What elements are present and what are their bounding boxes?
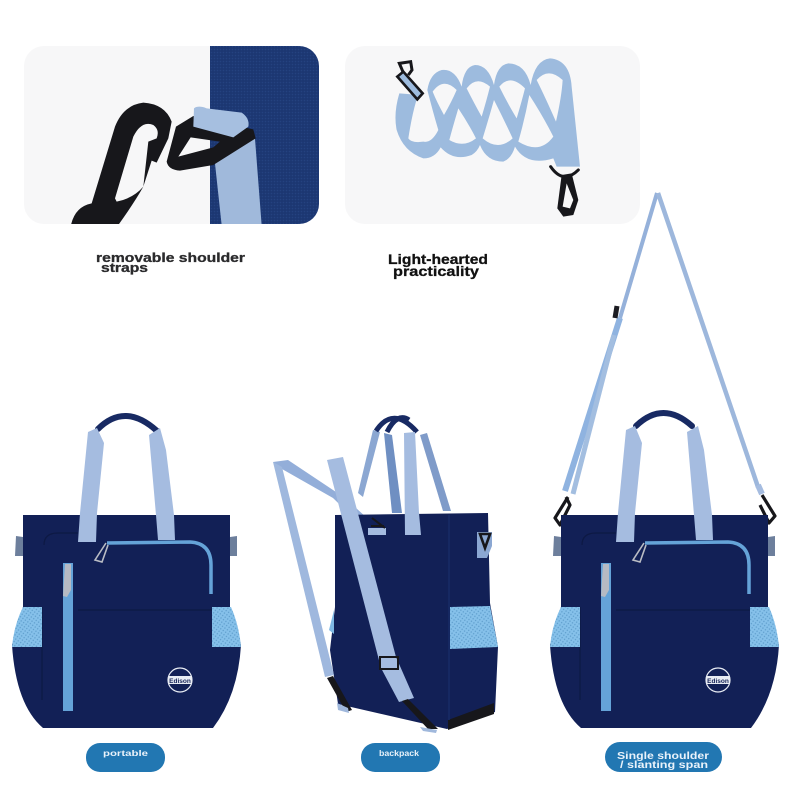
front handle strap	[404, 432, 421, 535]
bag: front view with shoulder strap	[550, 193, 779, 728]
mesh pocket	[450, 606, 498, 649]
right shoulder strap	[327, 457, 414, 702]
label pill: portable	[86, 743, 165, 772]
logo badge	[168, 668, 192, 692]
label pill: portable: portable	[103, 749, 149, 758]
small buckle	[397, 62, 423, 99]
panel: removable strap close-up	[71, 46, 319, 224]
long shoulder strap	[565, 193, 762, 494]
body	[550, 515, 779, 728]
mesh pockets	[550, 607, 580, 647]
label pill: backpack: backpack	[379, 749, 420, 758]
handle arcs	[376, 418, 417, 432]
logo badge: Edison	[169, 678, 191, 685]
folded light blue strap	[395, 58, 580, 167]
handle	[98, 416, 157, 431]
zipper pull	[601, 564, 609, 597]
small left mesh	[329, 610, 334, 634]
side loop with ring	[477, 532, 492, 558]
body	[12, 515, 241, 728]
triangular ring	[167, 116, 256, 171]
strap loop	[193, 107, 249, 137]
black snap hook	[71, 103, 172, 225]
black snap hooks	[555, 495, 775, 525]
caption: light-hearted practicality: practicality	[393, 263, 479, 279]
caption: removable shoulder straps	[96, 250, 245, 275]
body	[330, 513, 498, 729]
label pill: single shoulder: Single shoulder	[617, 751, 709, 762]
bag: front view, portable	[12, 416, 241, 728]
black base	[448, 703, 494, 730]
pocket zipper	[107, 542, 211, 594]
vertical zipper	[63, 563, 73, 711]
left shoulder strap upper arm	[273, 460, 378, 536]
panel: folded strap	[345, 46, 640, 224]
front pocket seams	[580, 533, 750, 700]
label pill: single shoulder: / slanting span	[620, 760, 708, 771]
hook on strap end	[551, 167, 578, 217]
rear handle straps	[358, 430, 380, 497]
left shoulder strap lower	[273, 462, 334, 677]
caption: light-hearted practicality: Light-hearted	[388, 251, 488, 267]
small strap buckle	[368, 518, 386, 535]
logo badge	[706, 668, 730, 692]
webbing tabs	[337, 703, 437, 733]
vertical zipper	[601, 563, 611, 711]
strap adjuster	[380, 657, 398, 669]
label pill: single shoulder	[605, 742, 722, 772]
handle	[636, 413, 692, 426]
carabiner pull	[633, 543, 646, 562]
strap webbing tab	[215, 138, 262, 225]
caption: removable shoulder straps: removable shoulder	[96, 250, 245, 265]
straps	[78, 428, 104, 542]
caption: light-hearted practicality	[388, 251, 488, 279]
logo badge: Edison	[707, 678, 729, 685]
caption: removable shoulder straps: straps	[101, 260, 148, 275]
pocket zipper	[645, 542, 749, 594]
navy fabric	[210, 46, 320, 224]
side ring hardware	[15, 536, 237, 556]
mesh pockets	[12, 607, 42, 647]
straps	[616, 426, 642, 542]
bag: back view, backpack	[273, 418, 498, 733]
zipper pull	[63, 564, 71, 597]
side ring hardware	[553, 536, 775, 556]
label pill: backpack	[361, 743, 440, 772]
front pocket seams	[42, 533, 212, 700]
side seam	[448, 515, 450, 720]
carabiner pull	[95, 543, 108, 562]
lower black webbing	[327, 676, 438, 729]
